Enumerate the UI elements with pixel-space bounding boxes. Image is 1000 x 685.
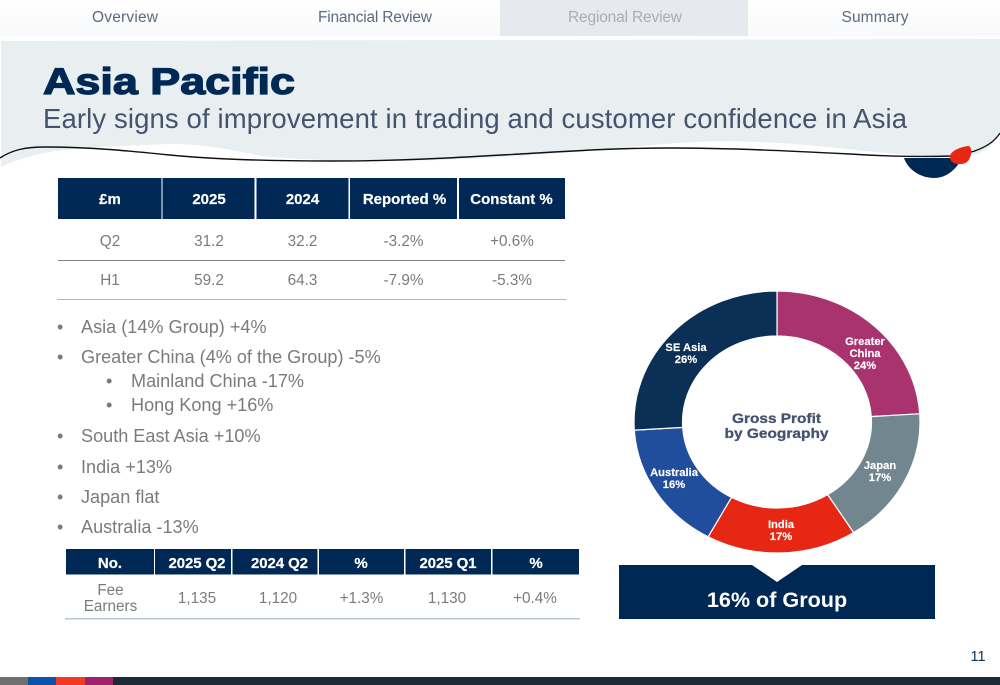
bullet list: • [57, 457, 63, 477]
icon: red blob [950, 146, 971, 164]
wave line [0, 133, 1000, 161]
banner background [1, 39, 1000, 167]
bullet list: • [57, 487, 63, 507]
callout: 16% of Group: 16% of Group [707, 587, 847, 612]
title: Asia Pacific [43, 60, 295, 102]
donut labels: 17% [770, 531, 792, 543]
donut centre label: by Geography [724, 426, 829, 441]
bullet list: Asia (14% Group) +4% [81, 317, 267, 337]
table: fee earners: 2025 Q2 [168, 555, 226, 572]
table: quarterly gross profit: 59.2 [194, 272, 224, 289]
table: fee earners [65, 549, 580, 620]
table: quarterly gross profit: 2024 [286, 191, 320, 208]
table: fee earners: +1.3% [340, 590, 384, 607]
table: fee earners: 2025 Q1 [420, 555, 476, 572]
bullet list: Japan flat [81, 487, 159, 507]
donut labels [650, 336, 896, 543]
table: quarterly gross profit: 64.3 [288, 272, 317, 289]
bullet list: • [106, 395, 112, 415]
bullet list: • [106, 371, 112, 391]
navigation tabs: Overview [92, 9, 159, 26]
table: fee earners: 1,135 [178, 590, 216, 607]
donut centre label [724, 411, 829, 441]
navigation tabs: Summary [842, 9, 909, 26]
table: quarterly gross profit [57, 178, 566, 300]
header banner [0, 39, 1000, 178]
callout: 16% of Group [619, 565, 935, 619]
bullet list: India +13% [81, 457, 172, 477]
subtitle: Early signs of improvement in trading and customer confidence in Asia [43, 103, 908, 134]
donut labels: 17% [869, 472, 891, 484]
table: quarterly gross profit: Q2 [100, 233, 120, 250]
navigation tabs: Regional Review [568, 9, 683, 26]
slice: SE Asia [634, 291, 777, 430]
slice: India [708, 495, 854, 553]
bullet list: Mainland China -17% [131, 371, 304, 391]
donut labels: China [849, 348, 881, 360]
table: quarterly gross profit: 32.2 [288, 233, 317, 250]
bullet list: South East Asia +10% [81, 426, 261, 446]
table: fee earners: 1,130 [428, 590, 466, 607]
page number: 11 [970, 649, 986, 665]
table: quarterly gross profit: £m [99, 191, 121, 208]
table: fee earners: Fee [97, 582, 124, 599]
bullet list: • [57, 517, 63, 537]
bullet list: • [57, 426, 63, 446]
table: quarterly gross profit: 2025 [192, 191, 226, 208]
donut labels: Greater [845, 336, 886, 348]
table: quarterly gross profit: 31.2 [194, 233, 224, 250]
footer colour bar [0, 677, 1000, 685]
donut labels: 26% [675, 354, 697, 366]
table: fee earners: No. [98, 555, 122, 572]
slice: Australia [634, 427, 732, 537]
donut labels: Japan [864, 460, 896, 472]
slice: Japan [828, 414, 920, 533]
donut labels: Australia [650, 467, 699, 479]
table: quarterly gross profit: -3.2% [384, 233, 424, 250]
table: fee earners: % [354, 555, 368, 572]
table: fee earners: % [529, 555, 543, 572]
bullet list: Greater China (4% of the Group) -5% [81, 347, 381, 367]
navigation tabs [0, 0, 1000, 36]
table: fee earners: 2024 Q2 [251, 555, 308, 572]
table: quarterly gross profit: +0.6% [490, 233, 534, 250]
slice: Greater China [777, 291, 920, 417]
table: quarterly gross profit: Constant % [470, 191, 553, 208]
table: quarterly gross profit: -5.3% [492, 272, 532, 289]
table: quarterly gross profit: Reported % [363, 191, 446, 208]
donut labels: 16% [663, 479, 685, 491]
table: quarterly gross profit: H1 [100, 272, 120, 289]
bullet list [57, 317, 381, 537]
bullet list: • [57, 317, 63, 337]
bullet list: • [57, 347, 63, 367]
table: fee earners: +0.4% [513, 590, 557, 607]
donut centre label: Gross Profit [732, 411, 822, 426]
donut chart: gross profit by geography [634, 291, 920, 553]
table: fee earners: 1,120 [259, 590, 297, 607]
donut labels: India [768, 519, 795, 531]
donut labels: SE Asia [665, 342, 707, 354]
bullet list: Australia -13% [81, 517, 199, 537]
navigation tabs: Financial Review [318, 9, 433, 26]
bullet list: Hong Kong +16% [131, 395, 273, 415]
table: quarterly gross profit: -7.9% [384, 272, 424, 289]
donut labels: 24% [854, 360, 876, 372]
icon: navy half circle [904, 158, 962, 178]
table: fee earners: Earners [84, 598, 138, 615]
